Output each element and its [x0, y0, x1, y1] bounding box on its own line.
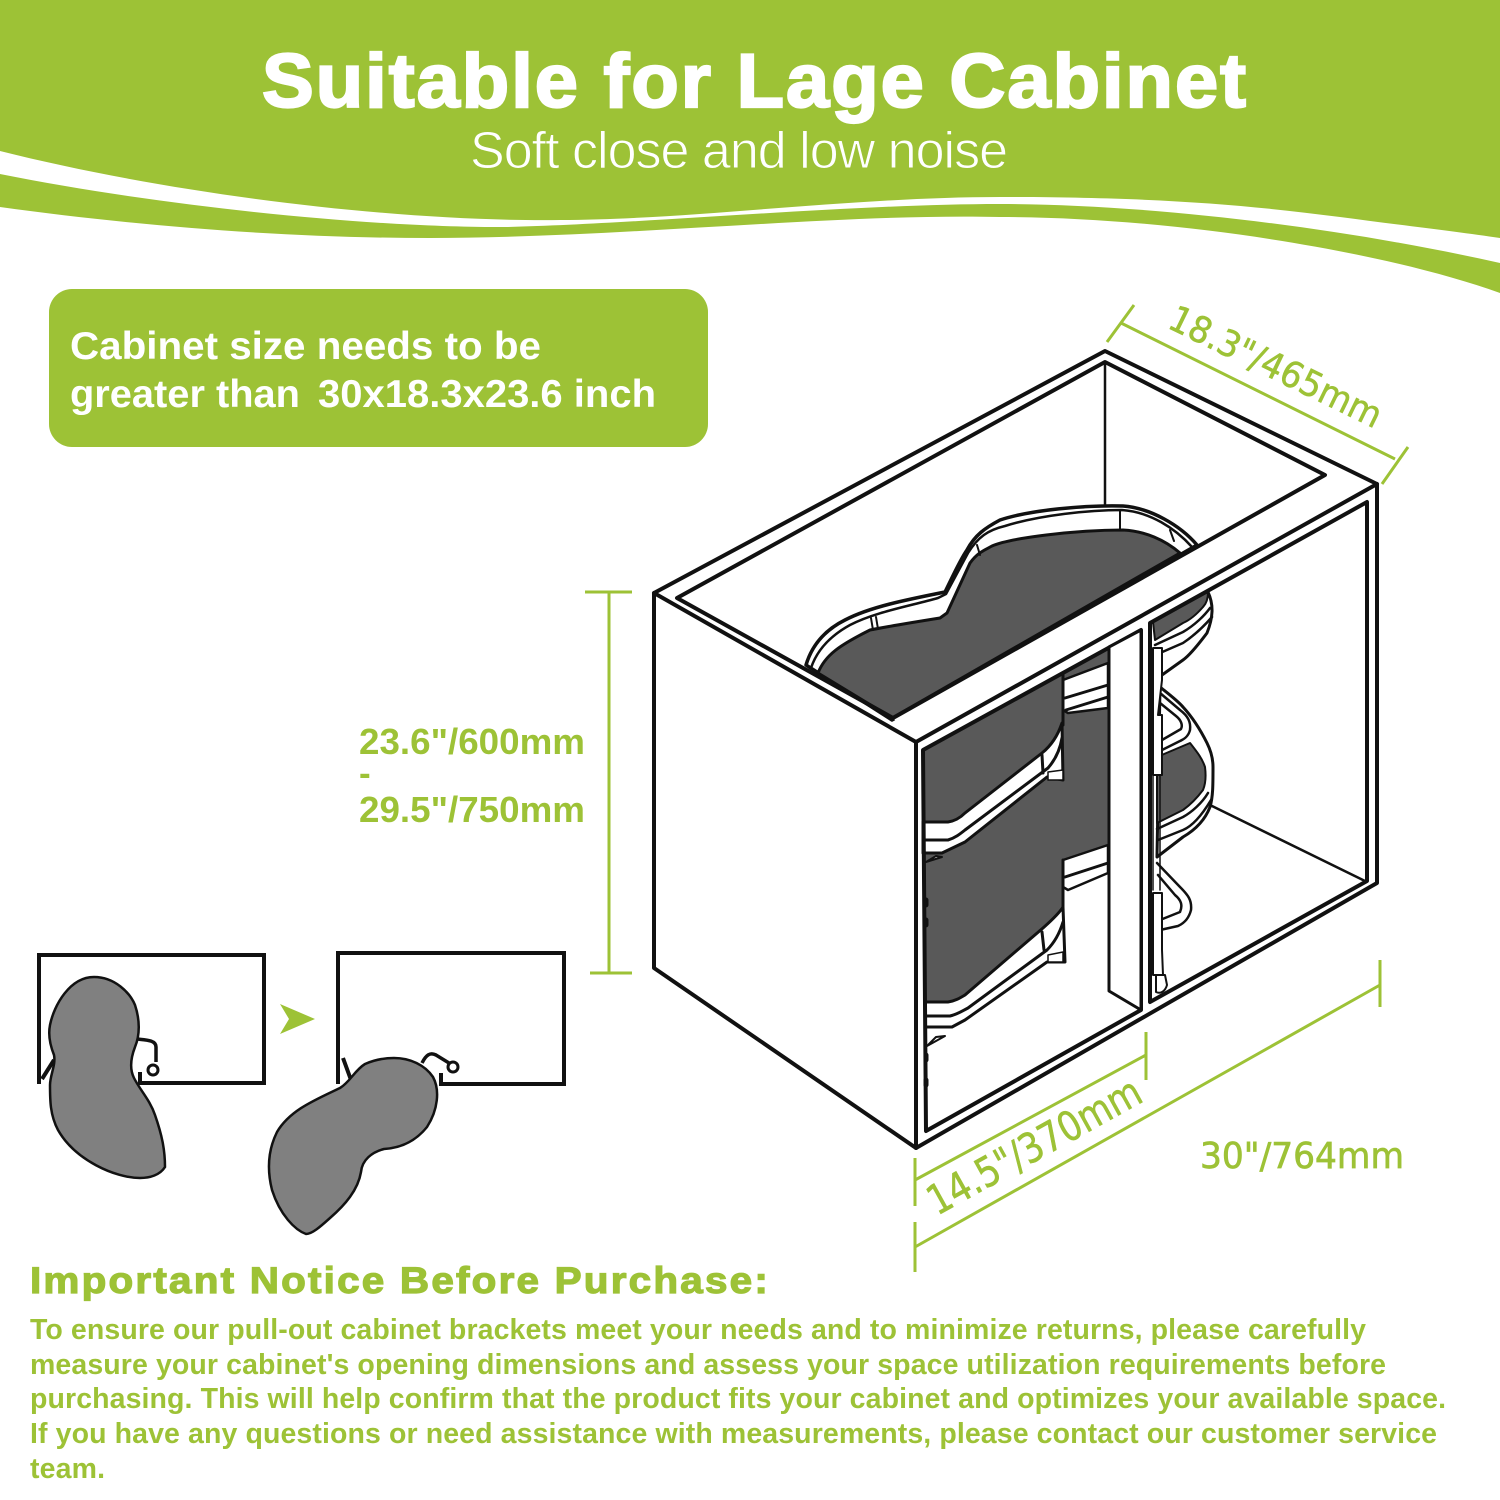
dimension: depth 18.3 in: 18.3"/465mm: [1162, 298, 1389, 437]
diagram: shelf pulled out, step 1: [39, 955, 264, 1178]
dimension: height range: 23.6"/600mm: [359, 721, 585, 762]
lower shelf back strip: [1063, 845, 1108, 908]
notice body text: team.: [30, 1453, 105, 1485]
cabinet frame: [654, 351, 1377, 1148]
notice body text: If you have any questions or need assistance with measurements, please contact our customer service: [30, 1418, 1437, 1450]
dimension: height range: 29.5"/750mm: [359, 789, 585, 830]
notice body text: To ensure our pull-out cabinet brackets meet your needs and to minimize returns, please carefully: [30, 1314, 1366, 1346]
arrow between diagrams: [280, 1004, 315, 1034]
notice body text: purchasing. This will help confirm that the product fits your cabinet and optimizes your available space.: [30, 1383, 1446, 1415]
upper swing arm: [1160, 693, 1190, 750]
lower swing arm: [1157, 863, 1191, 930]
title: Suitable for Lage Cabinet: [262, 39, 1248, 124]
notice body text: measure your cabinet's opening dimensions and assess your space utilization requirements before: [30, 1349, 1386, 1381]
header banner: [0, 0, 1500, 293]
center post: [1109, 630, 1141, 1010]
dimension: height range: [359, 592, 632, 973]
dimension: height range: -: [359, 754, 371, 793]
callout: minimum cabinet size: [49, 289, 708, 447]
upper shelf back strip: [1063, 663, 1108, 725]
top shelf: [806, 506, 1197, 720]
dimension: total width 30 in: [915, 960, 1404, 1272]
left section: grey shelf surfaces: [923, 648, 1108, 1002]
top shelf right section: [1150, 592, 1212, 675]
subtitle: Soft close and low noise: [470, 122, 1008, 180]
cabinet drawing with pull-out shelves: [654, 351, 1377, 1148]
hinge post: [1153, 648, 1167, 993]
notice body text: [30, 1314, 1446, 1485]
diagram: shelf pulled out, step 2: [269, 953, 564, 1234]
lower shelf rail: [925, 900, 1065, 1085]
lower shelf right section: [1157, 687, 1213, 857]
notice heading: Important Notice Before Purchase:: [30, 1260, 770, 1301]
dimension: depth 18.3 in: [1107, 298, 1408, 484]
dimension: inner width 14.5 in: 14.5"/370mm: [919, 1067, 1150, 1225]
callout: minimum cabinet size: greater than: [70, 373, 300, 416]
callout: minimum cabinet size: 30x18.3x23.6 inch: [318, 373, 656, 416]
dimension: total width 30 in: 30"/764mm: [1200, 1136, 1404, 1177]
callout: minimum cabinet size: Cabinet size needs to be: [70, 325, 541, 368]
upper shelf rail: [923, 723, 1063, 862]
